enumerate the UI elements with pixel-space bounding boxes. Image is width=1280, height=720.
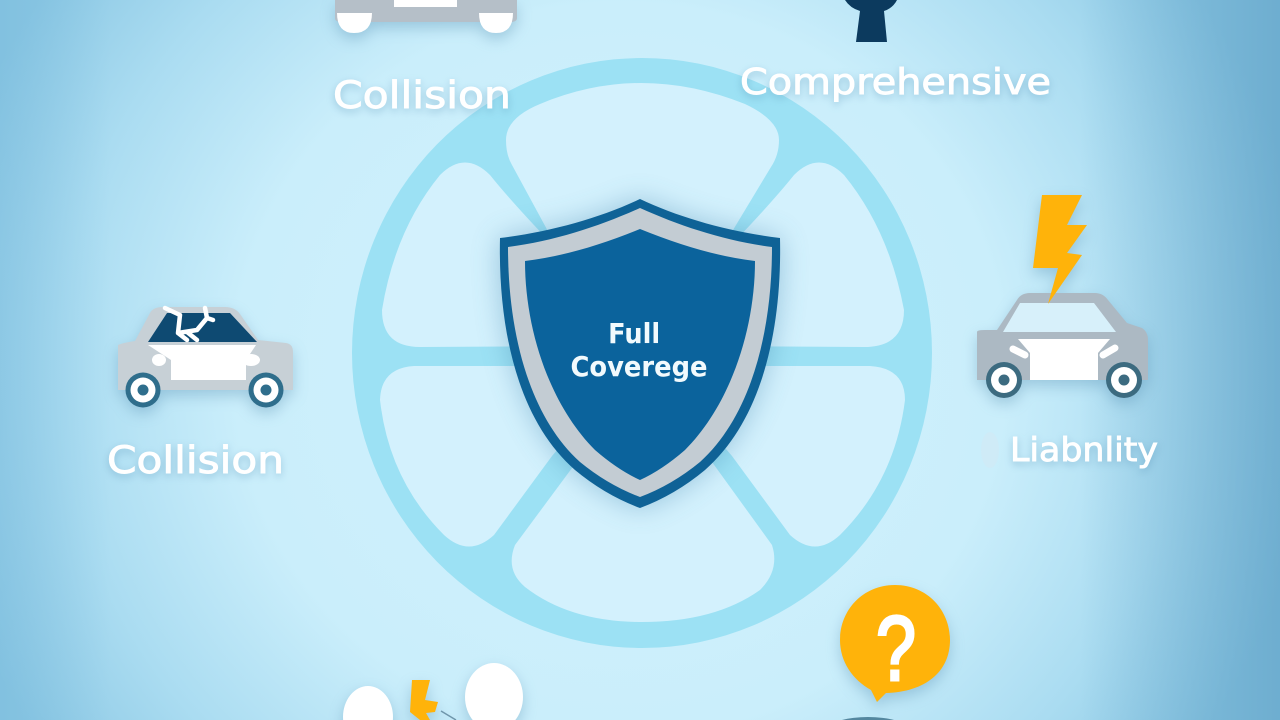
shield label: Full (608, 317, 660, 350)
icon: car with lightning bolt (977, 195, 1148, 398)
wheel segment: bottom (512, 420, 774, 622)
coverage wheel (352, 58, 932, 648)
icon: car with cracked windshield (118, 307, 293, 408)
icon: cropped object below question bubble (830, 717, 906, 720)
wheel segment: upper right (684, 162, 904, 347)
icon: lightning bolt (1033, 195, 1087, 304)
icon: top car cropped (335, 0, 517, 33)
icon: keyhole cropped (845, 0, 897, 42)
icon: question bubble (840, 585, 950, 702)
icon: question bubble: ? (876, 598, 916, 700)
label: comprehensive: Comprehensive (740, 62, 1051, 103)
shield label: Coverege (570, 350, 708, 383)
icon: bottom cropped figures (343, 663, 523, 720)
wheel segment: upper left (382, 162, 600, 347)
label: collision top: Collision (333, 74, 511, 117)
label: liability: Liabnlity (1010, 430, 1158, 469)
label: collision left: Collision (107, 439, 284, 482)
wheel segment: lower right (684, 366, 905, 546)
shield: full coverage (500, 199, 780, 508)
wheel segment: lower left (380, 366, 600, 546)
wheel segment: top (506, 83, 779, 300)
